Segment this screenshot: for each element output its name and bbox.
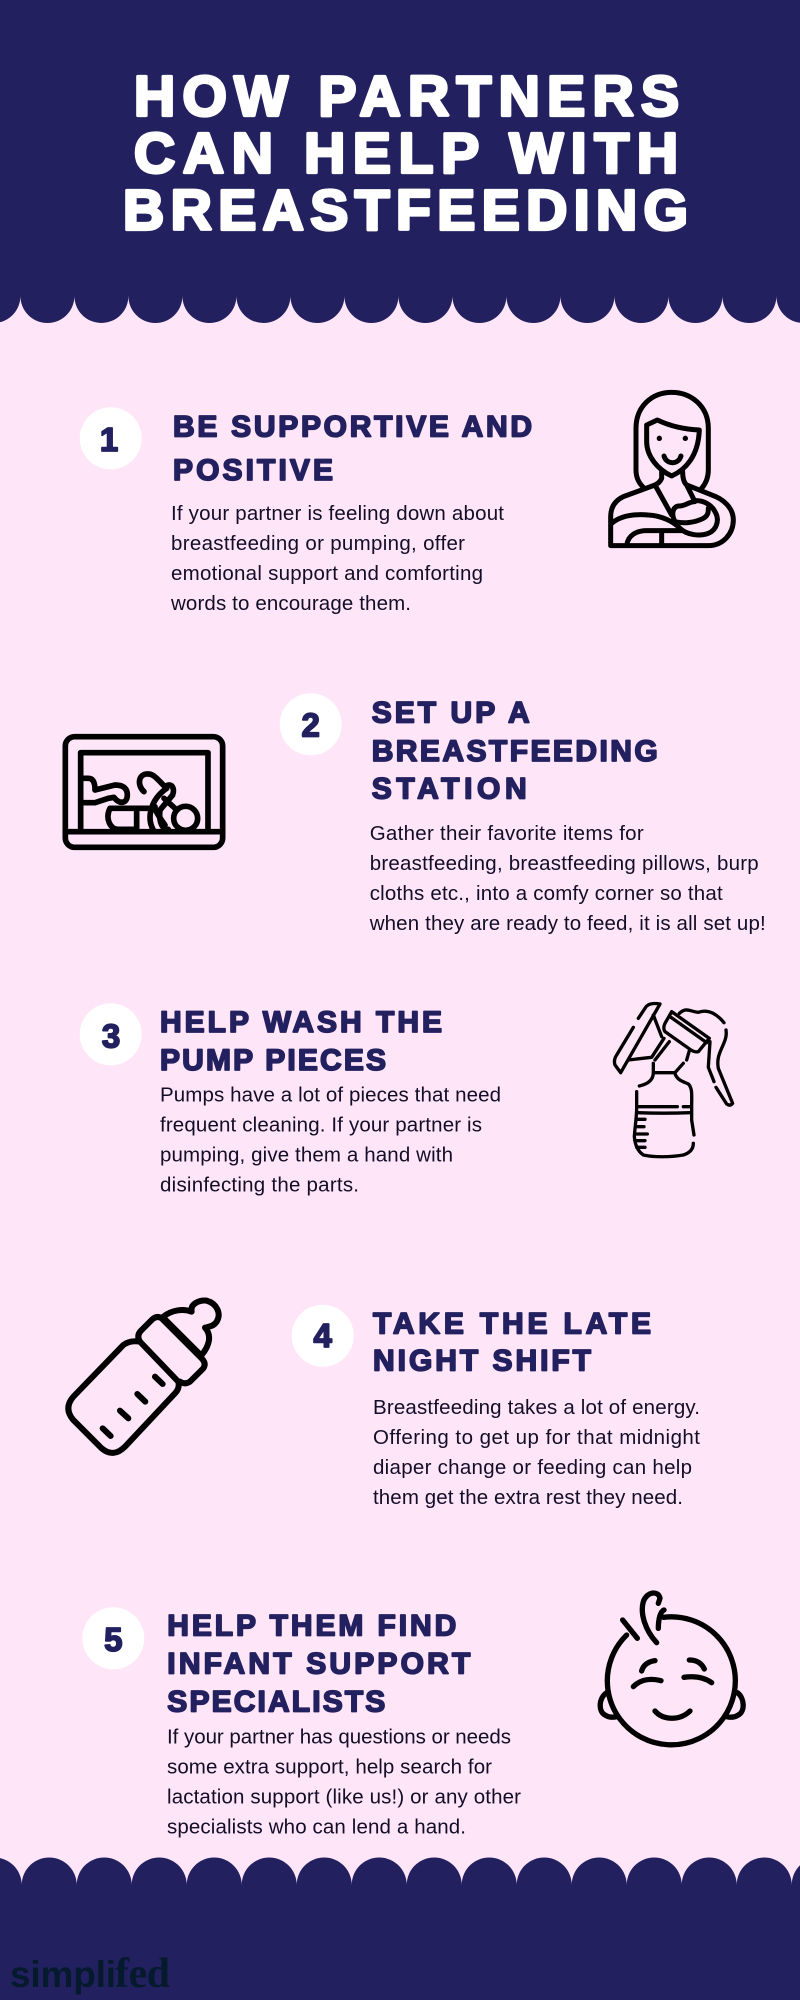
text block step 5: If your partner has questions or needs bbox=[167, 1725, 511, 1748]
heading step 4: NIGHT SHIFT bbox=[373, 1345, 591, 1378]
heading step 1: BE SUPPORTIVE AND bbox=[173, 410, 532, 444]
icon: breast pump bbox=[614, 1004, 733, 1157]
text block step 2: Gather their favorite items for bbox=[370, 822, 644, 845]
heading step 3: PUMP PIECES bbox=[160, 1044, 386, 1077]
text block step 4: Breastfeeding takes a lot of energy. bbox=[373, 1396, 700, 1419]
text block step 2: when they are ready to feed, it is all set up! bbox=[369, 912, 766, 935]
number badge 2 bbox=[280, 693, 342, 755]
text block step 5 bbox=[167, 1725, 521, 1838]
text block step 2: cloths etc., into a comfy corner so that bbox=[370, 882, 723, 905]
text block step 1: breastfeeding or pumping, offer bbox=[171, 532, 465, 555]
text block step 4 bbox=[373, 1396, 700, 1509]
text block step 3: Pumps have a lot of pieces that need bbox=[160, 1084, 501, 1107]
panel: step 5 help them find infant support specialists bbox=[82, 1593, 743, 1838]
heading step 1: POSITIVE bbox=[173, 454, 333, 487]
number badge 1: 1 bbox=[100, 421, 118, 458]
footer banner with scalloped edge bbox=[0, 1858, 800, 2000]
number badge 4: 4 bbox=[314, 1317, 333, 1354]
title: HOW PARTNERS bbox=[134, 64, 679, 128]
text block step 4: them get the extra rest they need. bbox=[373, 1486, 683, 1509]
title bbox=[123, 64, 688, 242]
number badge 5 bbox=[82, 1607, 144, 1669]
number badge 4 bbox=[292, 1305, 354, 1367]
text block step 3: pumping, give them a hand with bbox=[160, 1144, 453, 1167]
heading step 2 bbox=[372, 697, 658, 805]
header banner with scalloped edge bbox=[0, 0, 800, 323]
icon: smiling baby face bbox=[600, 1593, 743, 1745]
text block step 5: specialists who can lend a hand. bbox=[167, 1815, 466, 1838]
heading step 3 bbox=[160, 1006, 442, 1077]
number badge 1 bbox=[80, 407, 142, 469]
title: CAN HELP WITH bbox=[134, 122, 678, 186]
icon: baby bottle bbox=[68, 1301, 219, 1453]
heading step 2: SET UP A bbox=[372, 697, 530, 730]
number badge 2: 2 bbox=[302, 707, 320, 744]
number badge 5: 5 bbox=[104, 1621, 122, 1658]
number badge 3 bbox=[80, 1003, 142, 1065]
heading step 5 bbox=[167, 1610, 470, 1719]
logo wordmark: simplified bbox=[10, 1951, 170, 1997]
text block step 1: emotional support and comforting bbox=[171, 562, 483, 585]
heading step 5: INFANT SUPPORT bbox=[167, 1647, 470, 1680]
heading step 3: HELP WASH THE bbox=[160, 1006, 442, 1039]
panel: step 2 set up a breastfeeding station bbox=[65, 693, 766, 935]
heading step 4: TAKE THE LATE bbox=[373, 1307, 651, 1340]
text block step 3 bbox=[160, 1084, 501, 1197]
icon: nursing station shelf bbox=[65, 737, 223, 847]
heading step 1 bbox=[173, 410, 532, 487]
panel: step 4 take the late night shift bbox=[68, 1301, 700, 1509]
heading step 4 bbox=[373, 1307, 651, 1378]
panel: step 1 be supportive and positive bbox=[80, 392, 733, 615]
text block step 5: some extra support, help search for bbox=[167, 1755, 492, 1778]
icon: mother nursing baby bbox=[611, 392, 733, 546]
text block step 1 bbox=[170, 502, 504, 615]
panel: step 3 help wash the pump pieces bbox=[80, 1003, 733, 1197]
logo wordmark: simplified: simpli bbox=[10, 1954, 116, 1995]
text block step 4: diaper change or feeding can help bbox=[373, 1456, 692, 1479]
text block step 3: frequent cleaning. If your partner is bbox=[160, 1114, 482, 1137]
text block step 2 bbox=[369, 822, 766, 935]
heading step 2: STATION bbox=[372, 772, 527, 805]
title: BREASTFEEDING bbox=[123, 178, 688, 242]
text block step 5: lactation support (like us!) or any other bbox=[167, 1785, 521, 1808]
heading step 5: SPECIALISTS bbox=[167, 1686, 385, 1719]
text block step 2: breastfeeding, breastfeeding pillows, burp bbox=[370, 852, 759, 875]
logo wordmark: simplified: fed bbox=[115, 1951, 170, 1997]
number badge 3: 3 bbox=[102, 1017, 120, 1054]
heading step 2: BREASTFEEDING bbox=[372, 735, 658, 768]
text block step 1: If your partner is feeling down about bbox=[171, 502, 504, 525]
text block step 1: words to encourage them. bbox=[170, 592, 411, 615]
heading step 5: HELP THEM FIND bbox=[167, 1610, 456, 1643]
text block step 3: disinfecting the parts. bbox=[160, 1174, 359, 1197]
text block step 4: Offering to get up for that midnight bbox=[373, 1426, 700, 1449]
